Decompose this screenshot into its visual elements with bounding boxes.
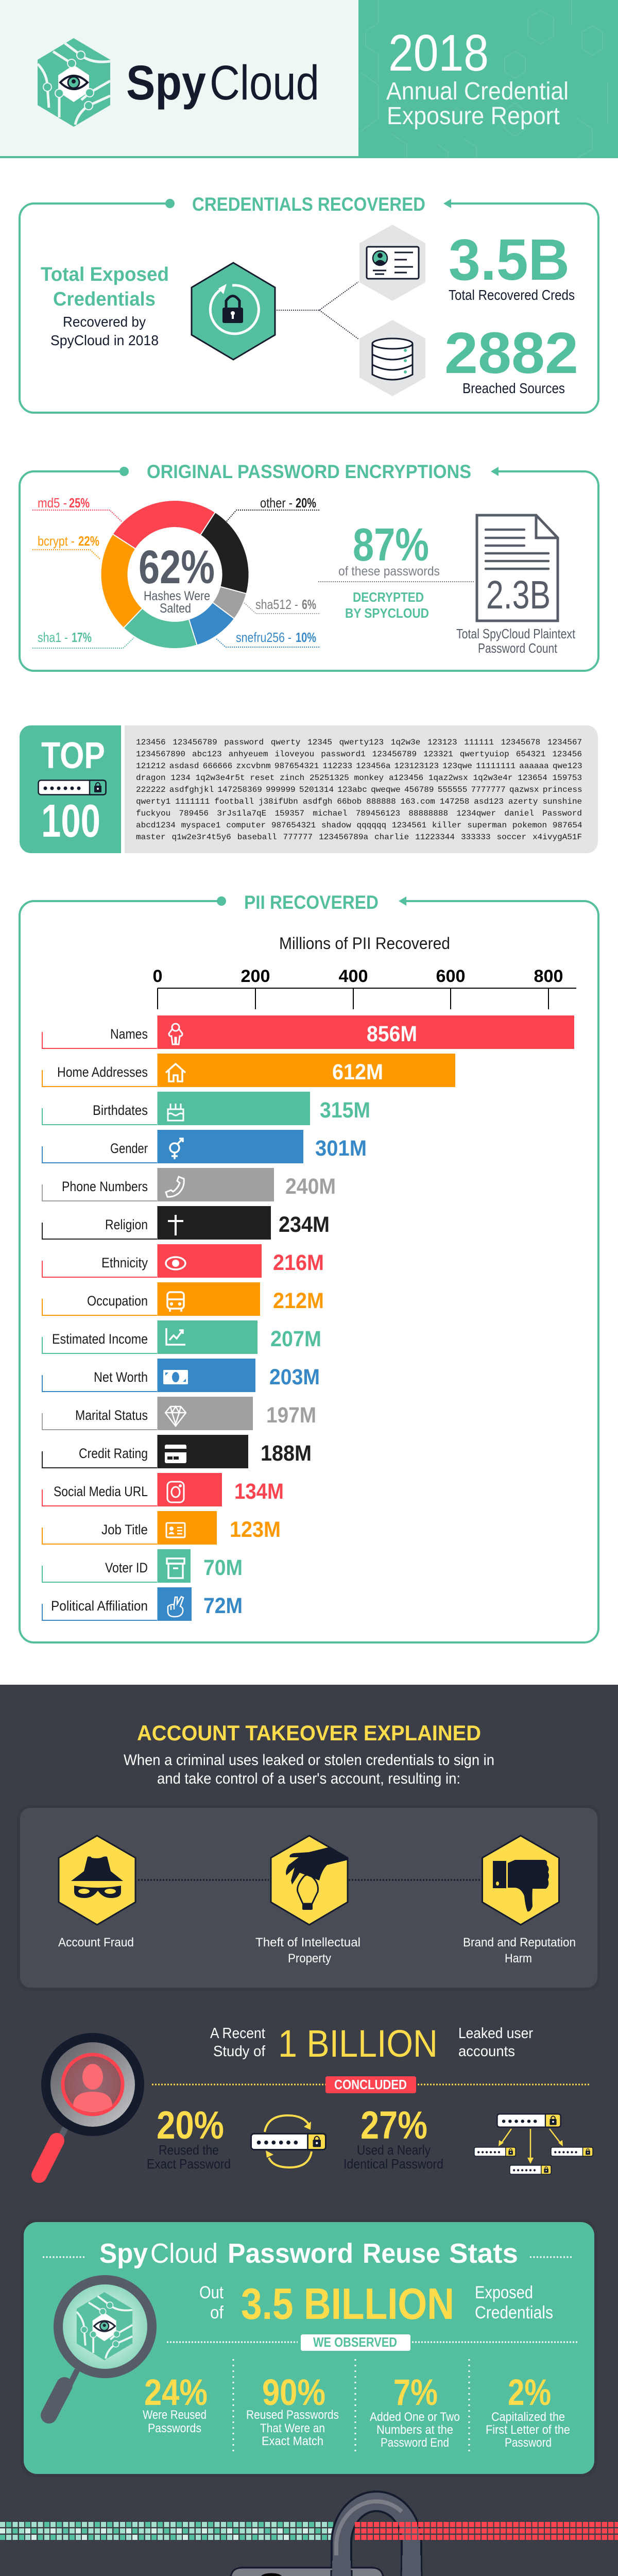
text: recent study of 1 billion: A Recent	[210, 2025, 265, 2042]
label: other	[227, 495, 319, 521]
chart title: Millions of PII Recovered	[279, 934, 450, 953]
text: total plaintext password count: Total SpyCloud Plaintext	[456, 626, 576, 641]
stat: 3.5B: 3.5B	[449, 227, 570, 292]
bar: names: Names	[110, 1026, 148, 1042]
bar: estimated income: Estimated Income	[52, 1331, 148, 1347]
text: total exposed credentials: Total Exposed	[41, 264, 169, 285]
label: bcrypt	[32, 533, 100, 560]
bar: occupation	[42, 1282, 324, 1316]
chart axis: 400	[339, 967, 368, 986]
label: bcrypt: bcrypt -	[38, 533, 75, 549]
label: md5: 25%	[69, 495, 90, 511]
stat: 2%	[486, 2372, 570, 2450]
stat: 87% decrypted by SpyCloud: DECRYPTED	[353, 589, 424, 605]
text: total exposed credentials	[41, 264, 169, 348]
bar: marital status: Marital Status	[75, 1408, 148, 1423]
stat: 2882: Breached Sources	[462, 380, 565, 396]
label: other: 20%	[296, 495, 316, 511]
text: recent study of 1 billion: Study of	[213, 2043, 266, 2060]
text: out of 3.5 billion exposed credentials: of	[210, 2303, 224, 2323]
bar: home addresses	[42, 1054, 455, 1087]
text: recent study of 1 billion	[210, 2022, 533, 2065]
label: sha1: 17%	[72, 630, 92, 645]
stat: 87% decrypted by SpyCloud	[318, 519, 475, 621]
bar: home addresses: Home Addresses	[57, 1064, 148, 1080]
stat: 87% decrypted by SpyCloud: 87%	[353, 519, 429, 571]
stat: 87% decrypted by SpyCloud: of these passwords	[338, 564, 440, 579]
stat: 90%	[246, 2372, 339, 2448]
bar: occupation: Occupation	[87, 1293, 148, 1309]
heading: SpyCloud password reuse stats	[43, 2238, 573, 2269]
label: sha512: sha512 -	[255, 597, 298, 612]
stat: 2%: First Letter of the	[486, 2423, 570, 2437]
report year: 2018	[388, 24, 489, 82]
text: recent study of 1 billion: Leaked user	[458, 2025, 533, 2042]
label: sha1: sha1 -	[38, 630, 68, 645]
donut center: 62% hashes were salted: 62%	[139, 541, 215, 594]
top 100 password list: fuckyou 789456 3rJs1la7qE 159357 michael 789456123 88888888 1234qwer daniel Password	[136, 809, 582, 818]
stat: 3.5B: Total Recovered Creds	[449, 287, 575, 303]
stat: 2%: Capitalized the	[491, 2410, 565, 2424]
bar: phone numbers	[42, 1168, 336, 1201]
stat: 7%: Numbers at the	[376, 2423, 453, 2437]
heading: PII recovered: PII RECOVERED	[244, 892, 379, 913]
stat: 2%: 2%	[508, 2372, 551, 2413]
bar: gender	[42, 1130, 367, 1163]
bar: social media URL: Social Media URL	[54, 1484, 148, 1499]
bar: social media URL	[42, 1473, 284, 1506]
SpyCloud wordmark	[126, 56, 319, 110]
text: definition: and take control of a user's account, resulting in:	[157, 1770, 460, 1787]
top 100 password list: 222222 asdfghjkl 147258369 999999 5201314 123abc qweqwe 456789 555555 7777777 qazwsx princess	[136, 785, 582, 794]
SpyCloud wordmark: Cloud	[210, 56, 319, 110]
chart axis: 200	[241, 967, 270, 986]
stat: 27% used a nearly identical password: Identical Password	[344, 2156, 443, 2172]
bar: ethnicity	[42, 1244, 324, 1278]
divider: we observed	[167, 2334, 578, 2351]
label: theft of intellectual property: Property	[288, 1952, 331, 1965]
label: md5: md5 -	[38, 495, 67, 511]
top 100 badge	[20, 725, 121, 853]
bar: names	[42, 1015, 574, 1049]
top 100 password list: abcd1234 myspace1 computer 987654321 shadow qqqqqq 1234561 killer superman pokemon 987654	[136, 821, 582, 830]
icon: red magnifying glass	[39, 2033, 144, 2175]
stat: 90%: Reused Passwords	[246, 2408, 339, 2422]
icon: password variations tree	[474, 2114, 593, 2174]
section: account takeover explained (dark)	[0, 1685, 618, 2576]
text: out of 3.5 billion exposed credentials: 3.5 BILLION	[241, 2280, 454, 2329]
stat: 20% reused the exact password: Exact Password	[147, 2156, 231, 2172]
donut center: 62% hashes were salted: Hashes Were	[144, 589, 210, 603]
label: brand and reputation harm: Brand and Reputation	[463, 1936, 576, 1950]
bar: marital status	[42, 1397, 316, 1430]
divider: we observed: WE OBSERVED	[313, 2334, 397, 2350]
heading: credentials recovered: CREDENTIALS RECOVERED	[192, 194, 425, 215]
stat: 27% used a nearly identical password	[344, 2104, 443, 2172]
divider: concluded: CONCLUDED	[334, 2077, 407, 2092]
label: sha512	[244, 597, 319, 614]
label: snefru256: snefru256 -	[236, 630, 291, 645]
stat: 87% decrypted by SpyCloud: BY SPYCLOUD	[345, 605, 429, 621]
report title	[386, 78, 569, 130]
label: brand and reputation harm	[463, 1936, 576, 1965]
stat: 2882: 2882	[444, 320, 578, 385]
heading: SpyCloud password reuse stats: Reuse	[363, 2238, 440, 2269]
bar: net worth: Net Worth	[94, 1369, 148, 1385]
bar: voter ID	[42, 1549, 243, 1583]
bar: political affiliation: Political Affiliation	[51, 1598, 148, 1614]
header banner	[0, 0, 618, 158]
text: definition	[124, 1752, 494, 1787]
divider: concluded	[152, 2076, 589, 2093]
top 100 password list: qwerty1 1111111 football j38ifUbn asdfgh 66bob 888888 163.com 147258 asd123 azerty sunshine	[136, 797, 582, 806]
chart axis	[152, 967, 576, 1009]
label: brand and reputation harm: Harm	[505, 1952, 532, 1965]
bar: net worth	[42, 1359, 320, 1392]
top 100 password list: master q1w2e3r4t5y6 baseball 777777 123456789a charlie 11223344 333333 soccer x4ivygA51F	[136, 833, 582, 842]
header report panel	[358, 0, 618, 158]
heading: SpyCloud password reuse stats: Spy	[99, 2238, 148, 2269]
text: out of 3.5 billion exposed credentials: Exposed	[475, 2283, 533, 2302]
bar: estimated income	[42, 1320, 321, 1354]
bar: estimated income: 207M	[270, 1327, 321, 1351]
label: account fraud: Account Fraud	[58, 1936, 134, 1950]
bar: ethnicity: 216M	[273, 1250, 324, 1275]
top 100 password list: dragon 1234 1q2w3e4r5t reset zinch 25251325 monkey a123456 1qaz2wsx 1q2w3e4r 123654 159753	[136, 773, 582, 783]
bar: job title: Job Title	[101, 1522, 148, 1537]
bar: credit rating: Credit Rating	[79, 1446, 148, 1461]
stat: 7%: Added One or Two	[370, 2410, 460, 2424]
bar: net worth: 203M	[269, 1365, 320, 1389]
text: out of 3.5 billion exposed credentials: Out	[199, 2283, 224, 2302]
label: snefru256: 10%	[296, 630, 316, 645]
panel: credentials recovered	[20, 194, 598, 413]
donut center: 62% hashes were salted: Salted	[160, 601, 191, 616]
bar: birthdates: 315M	[320, 1098, 370, 1123]
label: bcrypt: 22%	[78, 533, 99, 549]
icon: account fraud	[59, 1836, 135, 1925]
panel: PII recovered	[20, 892, 598, 1642]
heading: SpyCloud password reuse stats: Cloud	[150, 2238, 218, 2269]
bar: birthdates: Birthdates	[93, 1103, 148, 1118]
bar: ethnicity: Ethnicity	[101, 1255, 148, 1270]
panel: top 100 passwords	[20, 725, 598, 853]
bar: credit rating: 188M	[261, 1441, 312, 1466]
stat: 2%: Password	[505, 2436, 552, 2450]
label: md5	[32, 495, 122, 521]
label: other: other -	[260, 495, 293, 511]
stat: 90%: That Were an	[260, 2421, 325, 2435]
chart axis: 800	[534, 967, 563, 986]
text: recent study of 1 billion: accounts	[458, 2043, 515, 2060]
icon: plaintext password document	[477, 515, 558, 621]
stat: 20% reused the exact password	[147, 2104, 231, 2172]
stat: 24%: 24%	[144, 2372, 208, 2413]
label: sha512: 6%	[302, 597, 316, 612]
text: total exposed credentials: Credentials	[53, 289, 156, 310]
icon: open padlock	[231, 2501, 618, 2576]
label: theft of intellectual property: Theft of Intellectual	[255, 1936, 360, 1950]
panel: original password encryptions	[20, 461, 598, 671]
icon: database hexagon	[359, 320, 425, 396]
bar: political affiliation: 72M	[203, 1594, 243, 1618]
bar: credit rating	[42, 1435, 312, 1468]
SpyCloud wordmark: Spy	[126, 56, 206, 110]
text: definition: When a criminal uses leaked or stolen credentials to sign in	[124, 1752, 494, 1769]
stat: 90%: 90%	[262, 2372, 325, 2413]
stat: 27% used a nearly identical password: Used a Nearly	[357, 2142, 431, 2158]
label: snefru256	[216, 630, 319, 647]
stat: 20% reused the exact password: 20%	[157, 2104, 224, 2147]
label: theft of intellectual property	[255, 1936, 360, 1965]
icon: ID card hexagon	[359, 225, 425, 301]
stat: 7%: 7%	[393, 2372, 438, 2413]
text: total plaintext password count	[456, 626, 576, 656]
stat: 24%: Were Reused	[143, 2408, 207, 2422]
bar: birthdates	[42, 1092, 370, 1125]
heading: SpyCloud password reuse stats: Stats	[449, 2238, 518, 2269]
top 100 badge: TOP	[41, 735, 105, 776]
stat: 20% reused the exact password: Reused the	[159, 2142, 219, 2158]
bar: voter ID: Voter ID	[105, 1560, 148, 1575]
text: total plaintext password count: Password Count	[478, 640, 558, 656]
stat: 24%	[143, 2372, 208, 2435]
heading: SpyCloud password reuse stats: Password	[228, 2238, 353, 2269]
stat: 27% used a nearly identical password: 27%	[360, 2104, 427, 2147]
report title: Exposure Report	[387, 103, 560, 130]
heading: account takeover explained: ACCOUNT TAKEOVER EXPLAINED	[137, 1721, 481, 1745]
bar: religion: Religion	[105, 1217, 148, 1232]
bar: religion	[42, 1206, 330, 1240]
chart axis: 0	[152, 967, 163, 986]
chart axis: 600	[436, 967, 466, 986]
icon: teal magnifying glass	[49, 2275, 157, 2415]
bar: marital status: 197M	[266, 1403, 316, 1428]
icon: password reuse cycle	[251, 2115, 325, 2167]
top 100 badge: 100	[41, 795, 100, 847]
panel: SpyCloud password reuse stats	[21, 2219, 597, 2477]
data stream band	[0, 2522, 333, 2540]
stat: 90%: Exact Match	[262, 2434, 323, 2448]
bar: phone numbers: 240M	[285, 1174, 336, 1199]
stat: 7%: Password End	[381, 2436, 449, 2450]
icon: SpyCloud logo	[38, 38, 110, 127]
text: total exposed credentials: Recovered by	[63, 314, 146, 330]
bar: occupation: 212M	[273, 1289, 324, 1313]
bar: voter ID: 70M	[203, 1555, 243, 1580]
text: total exposed credentials: SpyCloud in 2018	[50, 332, 159, 348]
icon: plaintext password document: 2.3B	[486, 573, 551, 617]
donut center: 62% hashes were salted	[139, 541, 215, 616]
bar: job title: 123M	[230, 1517, 281, 1542]
heading: original password encryptions: ORIGINAL PASSWORD ENCRYPTIONS	[147, 461, 471, 482]
bar: home addresses: 612M	[332, 1060, 383, 1084]
icon: brand and reputation harm	[482, 1836, 559, 1925]
bar: names: 856M	[367, 1022, 417, 1046]
bar: gender: 301M	[315, 1136, 367, 1161]
icon: recovered lock hexagon	[192, 263, 275, 360]
bar: gender: Gender	[110, 1141, 148, 1156]
label: sha1	[32, 630, 134, 648]
top 100 password list: 121212 asdasd 666666 zxcvbnm 987654321 112233 123456a 123123123 123qwe 11111111 aaaaaa qwe123	[136, 761, 582, 771]
top 100 password list: 1234567890 abc123 anhyeuem iloveyou password1 123456789 123321 qwertyuiop 654321 123456	[136, 750, 582, 759]
icon: theft of intellectual property	[271, 1836, 348, 1925]
stat: 7%	[370, 2372, 460, 2450]
stat: 24%: Passwords	[148, 2421, 201, 2435]
donut chart: hash types	[100, 500, 249, 649]
panel: takeover results	[17, 1805, 600, 1991]
bar: religion: 234M	[279, 1212, 330, 1237]
report title: Annual Credential	[386, 78, 569, 105]
top 100 password list	[125, 725, 598, 853]
text: out of 3.5 billion exposed credentials: Credentials	[475, 2303, 553, 2323]
top 100 password list: 123456 123456789 password qwerty 12345 qwerty123 1q2w3e 123123 111111 12345678 1234567	[136, 738, 582, 747]
bar: social media URL: 134M	[234, 1479, 284, 1504]
bar: job title	[42, 1511, 281, 1545]
text: recent study of 1 billion: 1 BILLION	[278, 2022, 438, 2065]
bar: political affiliation	[42, 1587, 243, 1621]
bar: phone numbers: Phone Numbers	[62, 1179, 148, 1194]
